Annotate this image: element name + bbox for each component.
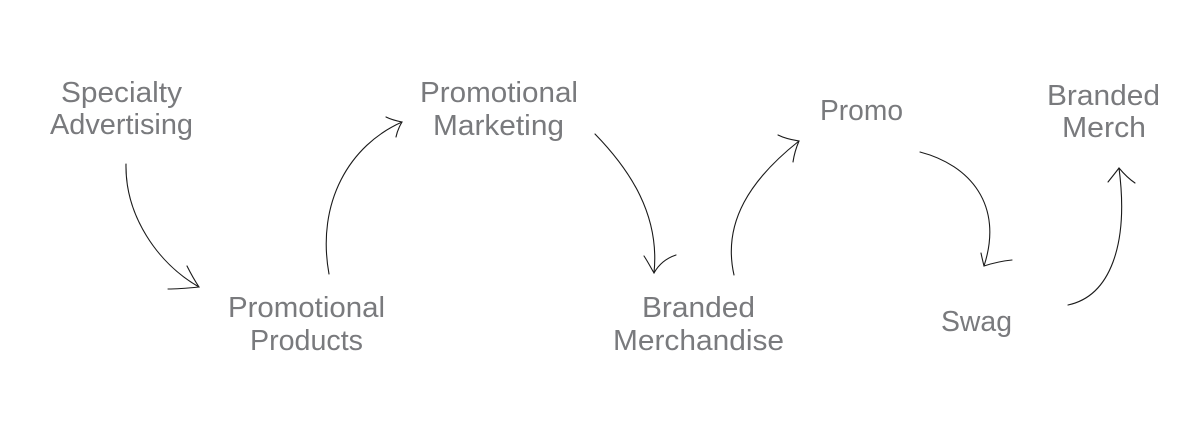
label: Promo: Promo — [820, 95, 903, 127]
label: Branded Merchandise — [613, 292, 784, 357]
label: Swag: Swag — [941, 306, 1012, 338]
label: Branded Merchandise: Branded — [642, 292, 755, 324]
label: Specialty Advertising: Advertising — [50, 109, 193, 141]
label: Promotional Marketing — [420, 77, 578, 142]
label: Promotional Products — [228, 292, 385, 357]
arrow: Promotional Marketing to Branded Merchandise — [595, 134, 676, 273]
label: Promotional Marketing: Promotional — [420, 77, 578, 109]
label: Promotional Marketing: Marketing — [433, 110, 564, 142]
label: Promotional Products: Products — [250, 325, 363, 357]
label: Branded Merch: Merch — [1062, 112, 1146, 144]
arrow: Promo to Swag — [920, 152, 1012, 266]
label: Branded Merch: Branded — [1047, 80, 1160, 112]
label: Specialty Advertising: Specialty — [61, 77, 183, 109]
label: Specialty Advertising — [50, 77, 193, 141]
arrow: Swag to Branded Merch — [1068, 168, 1135, 305]
label: Branded Merch — [1047, 80, 1160, 144]
arrow: Specialty Advertising to Promotional Products — [126, 164, 199, 289]
arrow: Branded Merchandise to Promo — [731, 135, 799, 275]
label: Branded Merchandise: Merchandise — [613, 325, 784, 357]
label: Promotional Products: Promotional — [228, 292, 385, 324]
arrow: Promotional Products to Promotional Marketing — [326, 117, 402, 274]
